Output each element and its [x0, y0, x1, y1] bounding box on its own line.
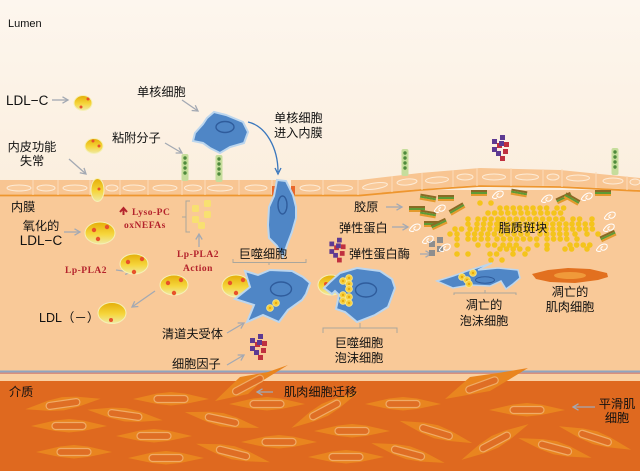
icon: cytokine cluster [250, 334, 267, 360]
label: elastase: 弹性蛋白酶 [349, 246, 410, 261]
arrow: LDL-C [52, 99, 68, 101]
icon: monocyte [193, 112, 248, 153]
label: cytokines: 细胞因子 [172, 357, 221, 371]
icon: adhesion molecules [182, 148, 618, 182]
icon: apoptotic foam cell [437, 263, 520, 289]
arrow: elastase [420, 253, 431, 255]
label: apoptotic muscle cell: 凋亡的 [552, 285, 588, 299]
label: elastin: 弹性蛋白 [339, 220, 388, 235]
icon: LDL engulfed [222, 275, 250, 297]
bracket: foam cell [323, 323, 397, 333]
icon: elastase squares [429, 237, 443, 256]
arrow: oxidized LDL-C [64, 231, 80, 233]
label: Lp-PLA2 Action: Action [183, 264, 213, 274]
label: endothelial dysfunction: 内皮功能 [8, 140, 56, 154]
icon: LDL particle [74, 96, 92, 110]
label: apoptotic foam cell: 凋亡的 [466, 298, 502, 312]
arrow: scavenger receptor [227, 323, 244, 333]
label: macrophage foam cell: 巨噬细胞 [335, 336, 383, 350]
icon: foam cell macrophage [324, 268, 395, 322]
arrow: smooth muscle cell [573, 406, 595, 408]
arrow: cytokines [227, 355, 244, 365]
title: lumen: Lumen [8, 18, 42, 30]
label: monocyte enters intima: 单核细胞 [274, 111, 323, 125]
endothelium [0, 168, 640, 196]
label: endothelial dysfunction: 失常 [20, 153, 44, 168]
icon: cytokine cluster lumen [492, 135, 509, 161]
arrow: collagen [386, 206, 402, 208]
icon: apoptotic muscle cell [532, 268, 608, 283]
intima layer [0, 190, 640, 373]
bracket: macrophage [233, 259, 306, 265]
icon: bracket [182, 201, 190, 232]
lipid plaque [450, 203, 599, 260]
arrow: endothelial dysfunction [69, 159, 86, 174]
label: oxNEFAs: oxNEFAs [124, 221, 166, 231]
label: monocyte: 单核细胞 [137, 85, 186, 99]
label: LDL(-): LDL（－） [39, 311, 99, 325]
label: macrophage: 巨噬细胞 [239, 246, 287, 261]
arrow: muscle cell migration [257, 391, 273, 393]
label: muscle cell migration: 肌肉细胞迁移 [284, 385, 357, 399]
label: LDL-C: LDL−C [6, 93, 49, 108]
lumen background [0, 0, 640, 196]
label: macrophage foam cell: 泡沫细胞 [335, 351, 383, 365]
icon: transmigrating macrophage [268, 180, 296, 257]
bracket: apoptotic foam cell [454, 290, 516, 295]
icon: yellow lipids [192, 200, 211, 229]
arrow: elastin [392, 226, 408, 228]
arrow: monocyte [182, 100, 198, 111]
icon: LDL particle crossing [85, 138, 103, 154]
internal elastic lamina [0, 370, 640, 381]
label: Lp-PLA2: Lp-PLA2 [65, 266, 107, 276]
arrow: Lp-PLA2 [116, 270, 131, 272]
arrow: adhesion molecule [165, 143, 182, 153]
label: adhesion molecule: 粘附分子 [112, 130, 161, 145]
label: monocyte enters intima: 进入内膜 [274, 126, 323, 140]
label: apoptotic muscle cell: 肌肉细胞 [546, 300, 594, 314]
media layer [0, 381, 640, 471]
icon: LDL engulfed by foam cell [318, 275, 344, 295]
label: Lyso-PC: Lyso-PC [132, 208, 170, 218]
label: apoptotic foam cell: 泡沫细胞 [460, 314, 508, 328]
icon: elastin fibers [409, 191, 615, 251]
label: lipid plaque: 脂质斑块 [499, 220, 547, 235]
icon: LDL in endothelium [91, 178, 104, 202]
label: oxidized LDL-C: LDL−C [20, 233, 62, 248]
label: collagen: 胶原 [354, 199, 378, 214]
label: smooth muscle cell: 平滑肌 [599, 397, 635, 411]
icon: cytokine cluster elastase [329, 238, 346, 262]
muscle cells in media [24, 386, 633, 469]
icon: oxidized LDL [85, 222, 115, 244]
label: smooth muscle cell: 细胞 [605, 411, 629, 425]
icon: LDL minus [98, 302, 126, 324]
label: media: 介质 [9, 385, 33, 399]
icon: collagen fibers [409, 189, 617, 242]
icon: macrophage [235, 270, 310, 322]
icon: LDL with Lp-PLA2 [120, 254, 148, 274]
label: Lp-PLA2 Action: Lp-PLA2 [177, 250, 219, 260]
label: oxidized LDL-C: 氧化的 [23, 219, 59, 233]
arrow: to LDL(-) [132, 291, 155, 307]
migrating muscle cell right [445, 368, 528, 399]
migrating muscle cell [215, 365, 288, 401]
label: scavenger receptor: 清道夫受体 [162, 327, 223, 341]
arrow: monocyte enters intima [248, 122, 281, 174]
arrow: action up [198, 234, 200, 247]
label: intima: 内膜 [11, 200, 35, 214]
icon: LDL particle 3 [160, 275, 188, 295]
